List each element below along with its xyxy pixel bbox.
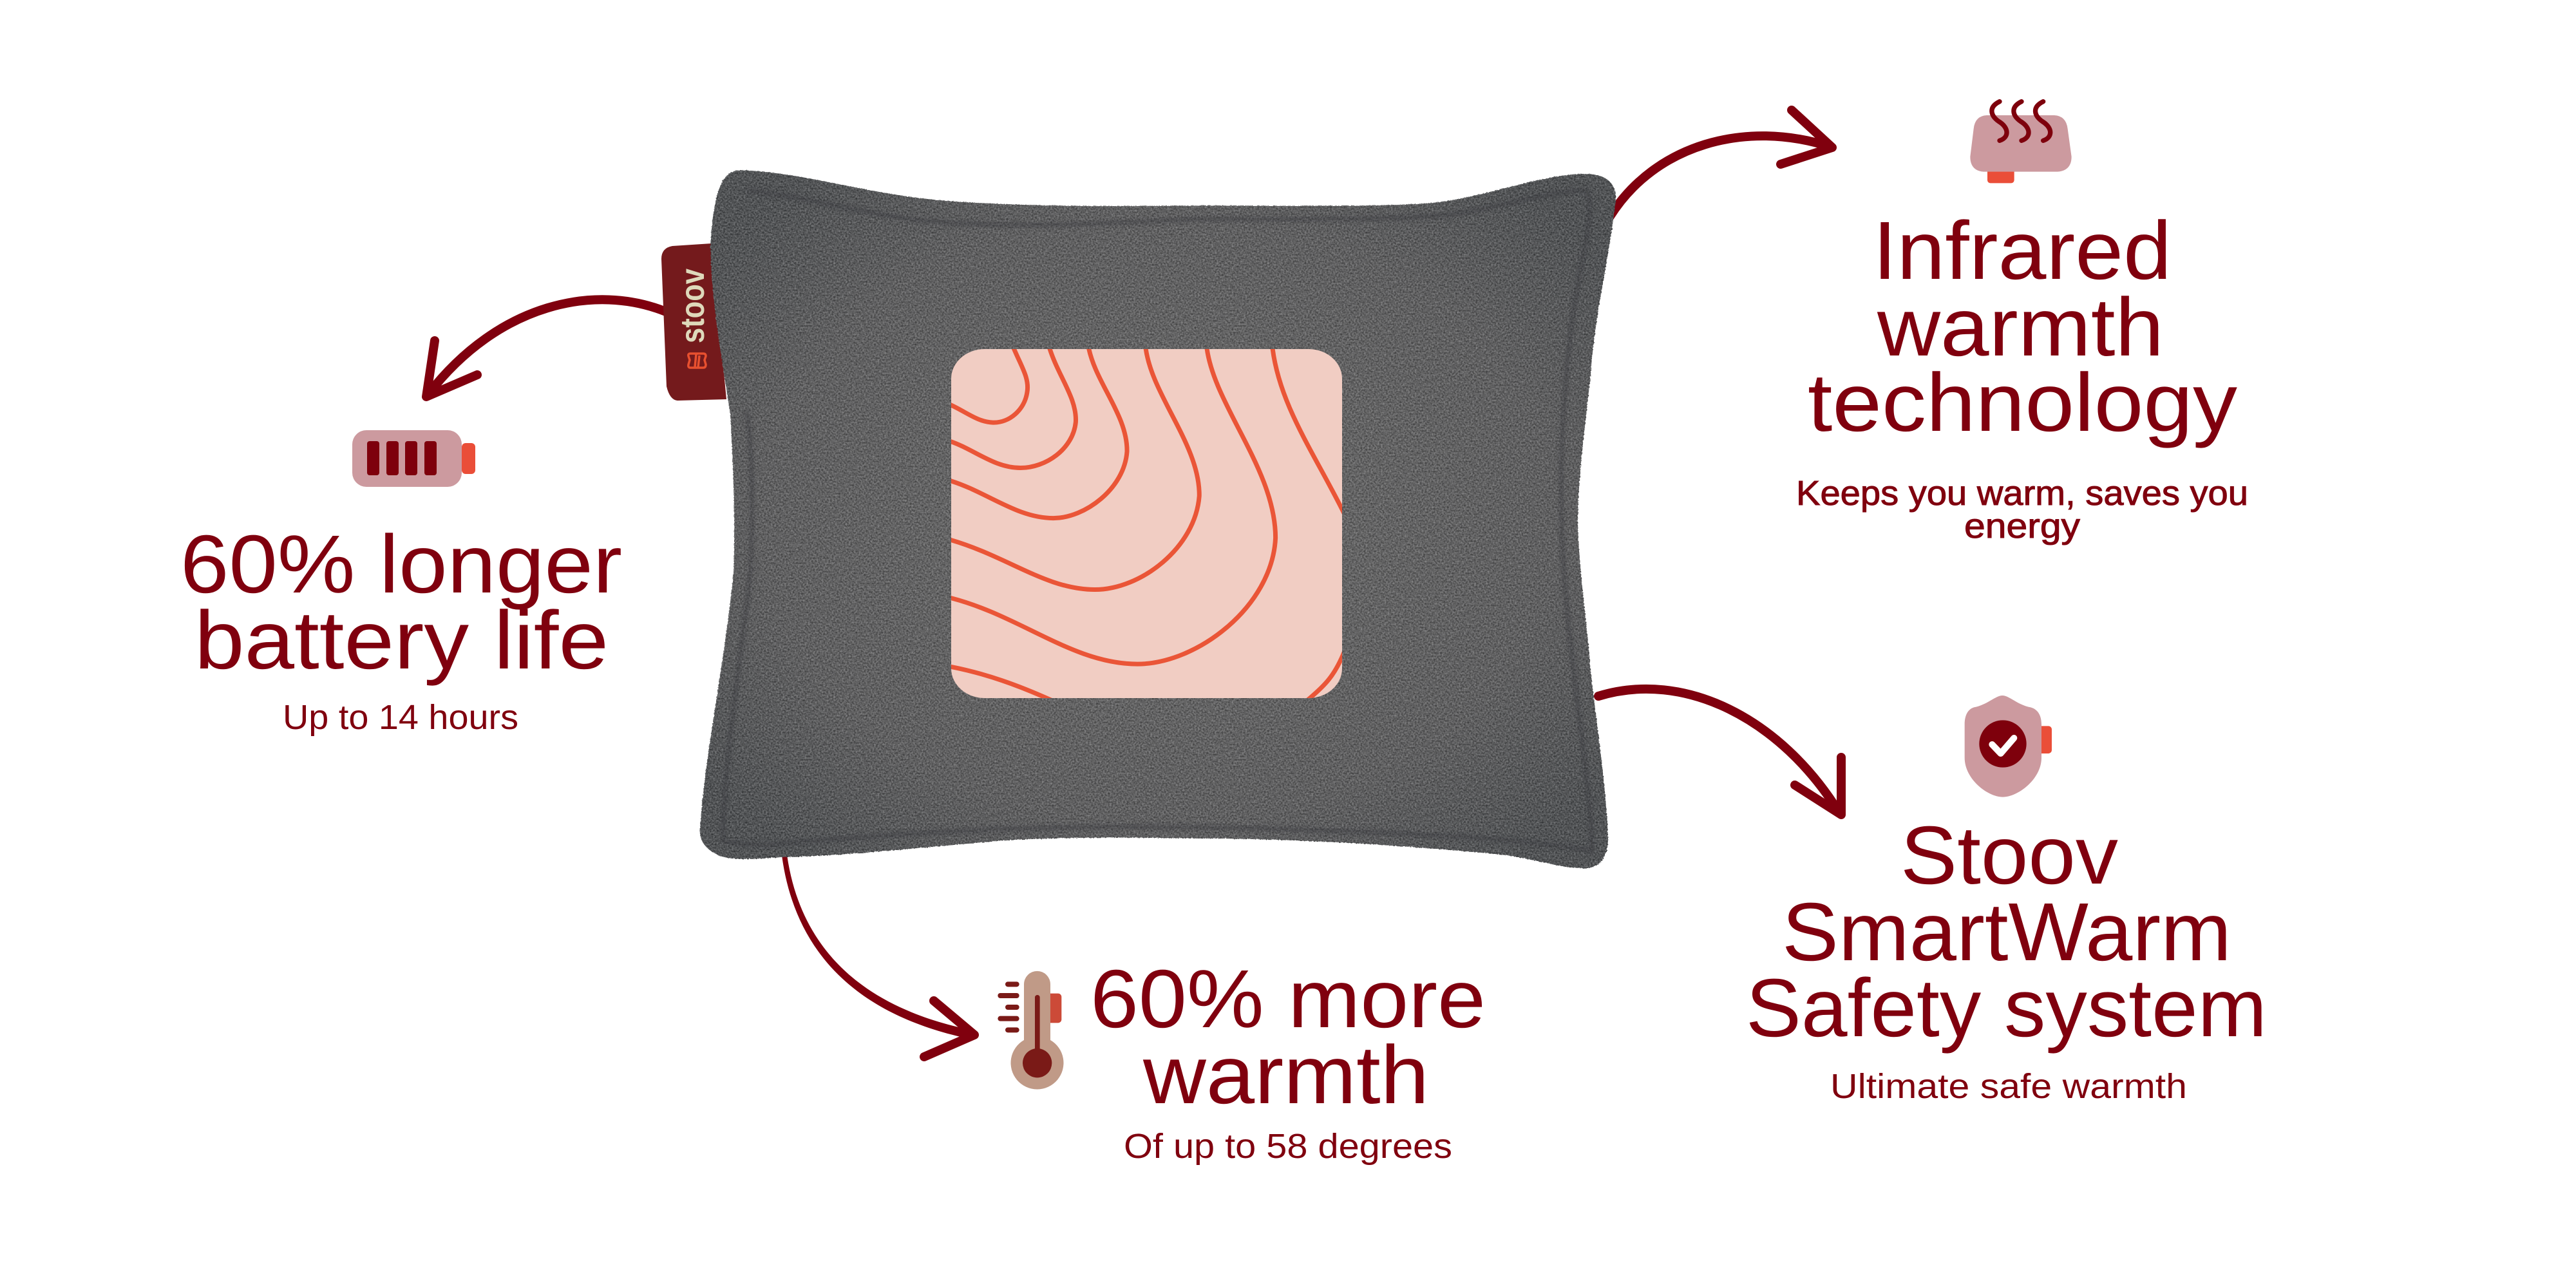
heading: 60% longer battery life <box>180 518 622 687</box>
heat pattern panel <box>947 346 1345 701</box>
heading: infrared warmth technology: technology <box>1808 357 2237 449</box>
caption: of up to 58 degrees: Of up to 58 degrees <box>1124 1127 1452 1166</box>
heading: infrared warmth technology: Infrared <box>1873 205 2172 297</box>
fabric tag with stoov label <box>661 243 726 401</box>
heading: 60% longer battery life: battery life <box>194 594 609 687</box>
feature: more warmth <box>998 953 1486 1166</box>
caption: up to 14 hours: Up to 14 hours <box>283 698 518 737</box>
icon: shield with check <box>1965 696 2052 797</box>
cushion piping seam <box>723 190 1592 851</box>
pillow product photo <box>661 170 1616 868</box>
heading: 60% longer battery life: 60% longer <box>180 518 622 611</box>
arrow: cushion to safety system <box>1598 689 1841 815</box>
arrow: cushion to more warmth <box>781 850 974 1057</box>
arrow: tag to battery life <box>426 299 666 397</box>
icon: thermometer <box>998 971 1063 1089</box>
grey felt cushion body <box>700 170 1616 868</box>
heading: stoov smartwarm safety system: Safety system <box>1746 962 2267 1054</box>
caption: keeps you warm, saves you energy: Keeps you warm, saves you <box>1796 474 2248 513</box>
tag wordmark: stoov <box>674 269 712 343</box>
heat contour lines <box>947 346 1345 701</box>
tag logo icon <box>688 354 706 368</box>
feature: battery life <box>180 430 622 737</box>
icon: heat waves <box>1970 102 2072 183</box>
arrow: cushion to infrared warmth <box>1610 110 1832 216</box>
feature: infrared warmth <box>1796 102 2248 545</box>
caption: ultimate safe warmth: Ultimate safe warmth <box>1830 1067 2187 1106</box>
heading: stoov smartwarm safety system <box>1746 810 2267 1054</box>
heading: stoov smartwarm safety system: Stoov <box>1900 810 2118 902</box>
heading: infrared warmth technology: warmth <box>1877 281 2164 374</box>
heading: 60% more warmth <box>1090 953 1486 1121</box>
heading: infrared warmth technology <box>1808 205 2237 449</box>
feature: safety system <box>1746 696 2267 1106</box>
heading: 60% more warmth: warmth <box>1142 1029 1429 1121</box>
heading: stoov smartwarm safety system: SmartWarm <box>1782 886 2231 978</box>
caption: keeps you warm, saves you energy <box>1796 474 2248 545</box>
icon: battery <box>352 430 475 487</box>
heading: 60% more warmth: 60% more <box>1090 953 1486 1045</box>
caption: keeps you warm, saves you energy: energy <box>1964 507 2080 545</box>
